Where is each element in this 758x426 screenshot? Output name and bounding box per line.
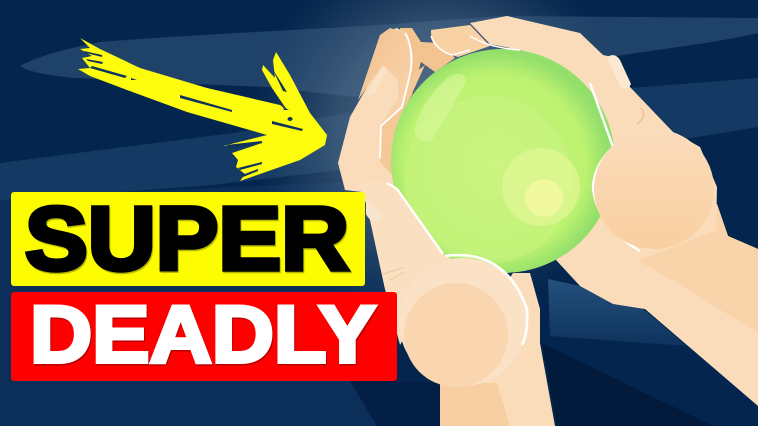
orb inner sheen — [404, 96, 572, 264]
orb light spot inner — [525, 179, 563, 217]
lower finger crease — [383, 268, 404, 280]
yellow arrow — [78, 38, 327, 181]
white rim: right hand — [590, 83, 640, 251]
right arm — [556, 180, 758, 406]
arrow brush slits — [84, 51, 303, 177]
SUPER shadow: SUPER — [26, 191, 350, 291]
SUPER text: SUPER — [25, 190, 349, 290]
green orb — [391, 49, 615, 273]
white rim: left finger — [380, 33, 411, 158]
lower left palm mound — [399, 255, 527, 387]
rear left finger — [358, 28, 412, 125]
DEADLY text: DEADLY — [30, 290, 376, 380]
left finger highlight — [367, 67, 385, 95]
DEADLY shadow: DEADLY — [31, 292, 377, 382]
lower arm — [440, 273, 555, 426]
upper thumb tip — [431, 25, 490, 57]
orange strip beside orb — [380, 65, 425, 175]
back finger — [400, 28, 455, 108]
orb glare — [414, 74, 466, 142]
knuckle crease — [637, 108, 644, 124]
orb light spot outer — [502, 148, 580, 226]
upper right hand — [470, 16, 717, 260]
lower left finger — [355, 180, 470, 360]
left hand — [338, 28, 450, 345]
white rim: top finger — [470, 36, 520, 50]
label: DEADLY — [11, 290, 397, 382]
label: SUPER — [11, 190, 365, 291]
lower finger nail — [366, 200, 382, 221]
white rim: lower finger — [387, 183, 443, 254]
upper right palm mound — [594, 129, 714, 249]
thumb nail — [607, 55, 631, 88]
white rim: thumb tip — [431, 36, 470, 55]
